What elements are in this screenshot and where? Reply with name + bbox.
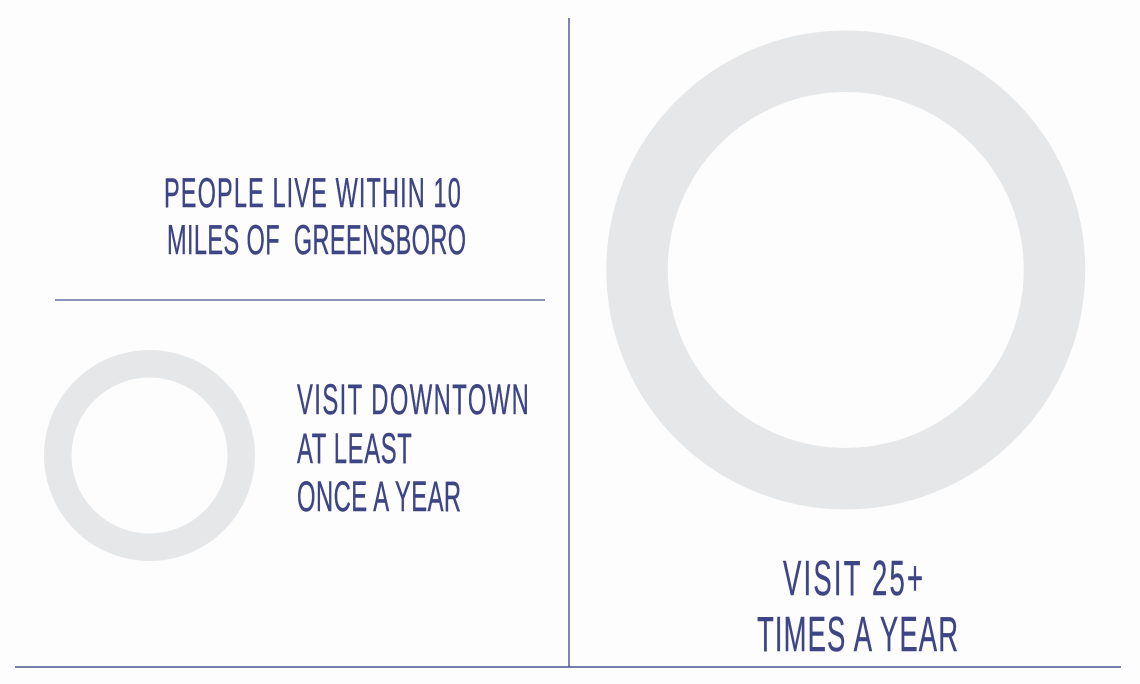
heading: people within 10 miles: MILES OF GREENSBORO bbox=[167, 217, 466, 264]
large ring chart bbox=[637, 61, 1054, 479]
label: visit 25+ times a year bbox=[757, 552, 958, 662]
label: visit downtown at least once a year: AT LEAST bbox=[297, 426, 412, 473]
label: visit 25+ times a year: VISIT 25+ bbox=[783, 552, 923, 606]
label: visit 25+ times a year: TIMES A YEAR bbox=[757, 608, 958, 662]
small ring chart bbox=[58, 364, 241, 547]
label: visit downtown at least once a year: ONCE A YEAR bbox=[297, 474, 461, 521]
label: visit downtown at least once a year bbox=[297, 377, 529, 521]
label: visit downtown at least once a year: VISIT DOWNTOWN bbox=[297, 377, 529, 424]
heading: people within 10 miles: PEOPLE LIVE WITHIN 10 bbox=[164, 170, 461, 217]
heading: people within 10 miles bbox=[164, 170, 466, 264]
